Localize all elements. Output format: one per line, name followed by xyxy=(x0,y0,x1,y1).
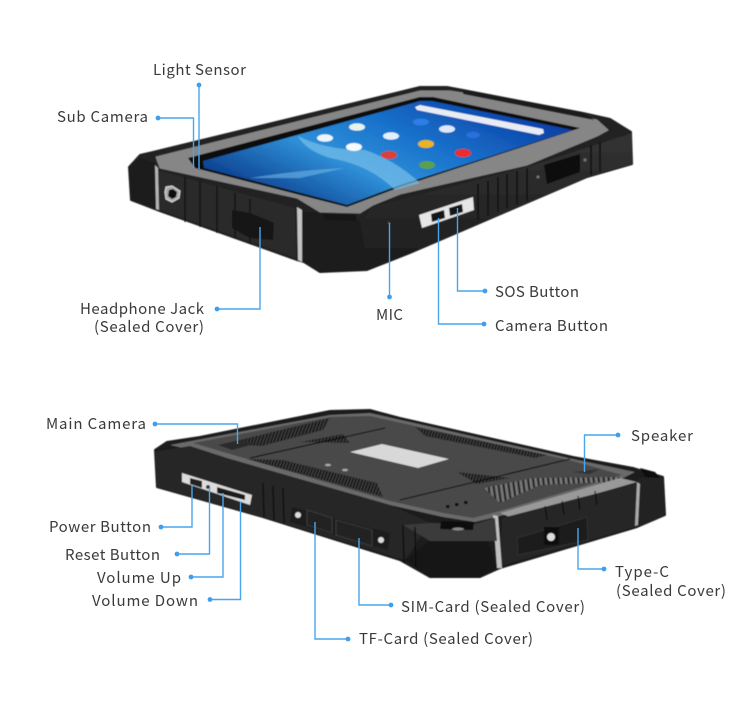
callout: SIM-Card: SIM-Card (Sealed Cover) xyxy=(401,596,585,617)
camera button xyxy=(431,210,445,222)
left side panel xyxy=(157,170,296,258)
side seams xyxy=(185,177,250,244)
search bar xyxy=(415,105,544,135)
lower hatch xyxy=(457,472,510,484)
small hatch xyxy=(300,434,350,443)
upper right hatch band xyxy=(415,427,547,458)
reset hole xyxy=(206,485,210,489)
callout: Type-C: Type-C xyxy=(615,561,669,582)
app icons xyxy=(317,118,480,169)
side lower body xyxy=(350,133,632,270)
panel seam lines xyxy=(250,428,570,500)
top edge rail xyxy=(463,90,594,120)
callout: Sub Camera: Sub Camera xyxy=(57,106,148,127)
gray chassis ring xyxy=(170,413,635,522)
cover screws xyxy=(295,512,301,518)
callout: Camera Button: Camera Button xyxy=(495,315,608,336)
upper hatch band xyxy=(223,418,330,446)
callout: Headphone Jack: (Sealed Cover) xyxy=(94,316,204,337)
callout: Light Sensor xyxy=(153,59,246,169)
corner notch xyxy=(323,214,357,221)
callout: Main Camera: Main Camera xyxy=(46,413,146,434)
right stripe xyxy=(493,515,502,568)
front corner block xyxy=(405,540,497,577)
power button xyxy=(190,478,202,488)
callout: Volume Down xyxy=(92,502,240,611)
callout: MIC xyxy=(376,223,403,325)
right side gray top xyxy=(500,478,637,518)
callout: Main Camera xyxy=(46,413,238,444)
blue screen xyxy=(203,101,573,205)
callout: SIM-Card xyxy=(359,538,585,617)
callout: TF-Card xyxy=(315,522,533,649)
callout: Reset Button: Reset Button xyxy=(65,544,160,565)
callout: Camera Button xyxy=(438,218,608,336)
headphone jack cover xyxy=(232,210,274,240)
tablet body silhouette xyxy=(129,87,632,272)
callout: Type-C xyxy=(578,528,726,601)
callout: MIC: MIC xyxy=(376,304,403,325)
back panel xyxy=(193,416,622,518)
gray bezel frame xyxy=(156,91,608,213)
wallpaper swoosh xyxy=(298,136,420,190)
SIM and TF cover xyxy=(290,507,390,550)
MIC hole xyxy=(388,222,390,224)
callout: Speaker xyxy=(584,425,693,472)
callout: Power Button: Power Button xyxy=(49,516,151,537)
callout: Volume Up: Volume Up xyxy=(97,567,181,588)
callout: Volume Down: Volume Down xyxy=(92,590,198,611)
callout: SOS Button: SOS Button xyxy=(495,281,579,302)
hex port xyxy=(165,186,180,202)
callout: Reset Button xyxy=(65,488,210,565)
speaker vent xyxy=(572,469,600,474)
main camera module xyxy=(218,440,255,450)
callout: SOS Button xyxy=(458,208,579,302)
power and volume plate xyxy=(182,473,252,505)
right end seams xyxy=(545,491,597,520)
left end cap xyxy=(129,158,157,209)
right end corner xyxy=(638,477,665,526)
callout: TF-Card: TF-Card (Sealed Cover) xyxy=(359,628,533,649)
tablet: rear view xyxy=(155,410,665,577)
callout: Headphone Jack: Headphone Jack xyxy=(80,298,205,319)
side ribs xyxy=(478,168,527,220)
callout: Sub Camera xyxy=(57,106,194,168)
black screen border xyxy=(188,97,580,207)
fingerprint port xyxy=(544,154,580,184)
center hatch band xyxy=(247,459,383,497)
volume rocker xyxy=(217,487,245,500)
left lower body xyxy=(155,446,430,560)
SOS button xyxy=(449,204,463,216)
rear ribs xyxy=(263,483,416,567)
light side stripe front xyxy=(297,207,302,262)
right grille band xyxy=(484,477,623,503)
Type-C cover xyxy=(517,517,588,555)
back dots xyxy=(325,464,468,508)
callout: Speaker: Speaker xyxy=(631,425,693,446)
light side stripe left xyxy=(155,165,159,210)
rear body silhouette xyxy=(155,410,665,577)
callout: Type-C: (Sealed Cover) xyxy=(616,580,726,601)
tablet: front view xyxy=(129,87,632,272)
white label xyxy=(350,444,449,468)
right end panel xyxy=(500,483,638,566)
corner block xyxy=(303,212,368,272)
SOS and camera button plate xyxy=(419,197,474,228)
callout: Headphone Jack xyxy=(80,227,260,337)
callout: Light Sensor: Light Sensor xyxy=(153,59,246,80)
Type-C screw xyxy=(544,527,559,545)
callout: Volume Up xyxy=(97,493,223,588)
callout: Power Button xyxy=(49,485,192,537)
